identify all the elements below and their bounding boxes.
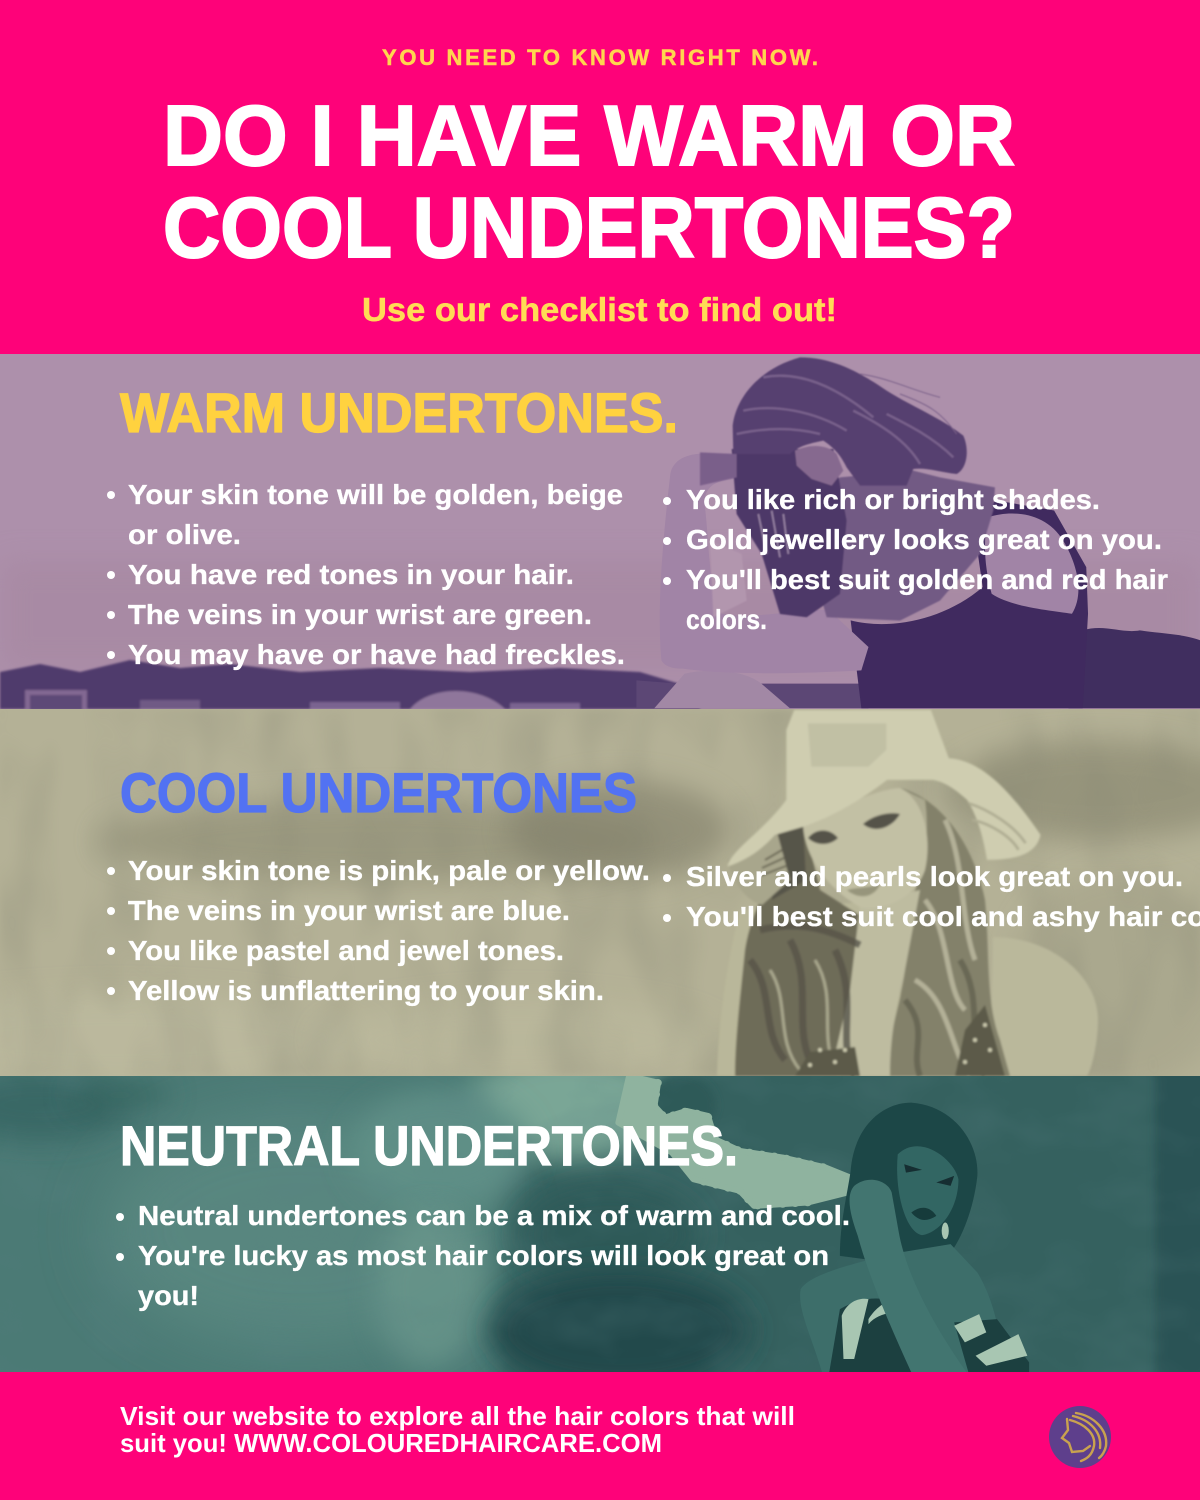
checklist: warm, left column: You may have or have had freckles.	[128, 639, 625, 670]
panel: warm undertones	[0, 354, 1200, 710]
checklist: neutral: You're lucky as most hair colors will look great on	[138, 1240, 829, 1271]
checklist: neutral: you!	[138, 1280, 199, 1311]
photo: woman by the water, purple duotone	[0, 354, 1200, 710]
heading: warm undertones: WARM UNDERTONES.	[120, 381, 678, 444]
checklist: cool, right column: Silver and pearls look great on you.	[686, 861, 1183, 892]
checklist: cool, left column: The veins in your wrist are blue.	[128, 895, 570, 926]
footer call to action: suit you! WWW.COLOUREDHAIRCARE.COM	[120, 1428, 662, 1458]
heading: neutral undertones: NEUTRAL UNDERTONES.	[120, 1114, 738, 1177]
footer panel	[0, 1372, 1200, 1500]
checklist: cool, left column: Your skin tone is pink, pale or yellow.	[128, 855, 650, 886]
eyebrow text: YOU NEED TO KNOW RIGHT NOW.	[382, 45, 818, 70]
subtitle: Use our checklist to find out!	[362, 291, 837, 328]
checklist: warm, left column: You have red tones in your hair.	[128, 559, 574, 590]
checklist: cool, right column	[663, 861, 1200, 932]
checklist: warm, left column: or olive.	[128, 519, 241, 550]
photo: woman in sun hat, olive duotone	[0, 709, 1200, 1090]
checklist: warm, right column	[663, 484, 1168, 635]
title: DO I HAVE WARM OR	[163, 89, 1015, 184]
panel: neutral undertones	[0, 1076, 1200, 1372]
footer call to action: Visit our website to explore all the hair colors that will	[120, 1401, 795, 1431]
title: COOL UNDERTONES?	[163, 181, 1015, 276]
icon: hair care logo	[1049, 1406, 1111, 1468]
title	[163, 89, 1015, 276]
checklist: warm, right column: Gold jewellery looks great on you.	[686, 524, 1162, 555]
checklist: cool, left column: Yellow is unflattering to your skin.	[128, 975, 604, 1006]
footer call to action	[120, 1401, 795, 1458]
checklist: cool, left column: You like pastel and jewel tones.	[128, 935, 564, 966]
checklist: cool, left column	[107, 855, 650, 1006]
checklist: warm, right column: You like rich or bright shades.	[686, 484, 1100, 515]
checklist: warm, left column: The veins in your wrist are green.	[128, 599, 592, 630]
panel: cool undertones	[0, 709, 1200, 1090]
photo: woman with smoke, teal duotone	[0, 1076, 1200, 1372]
header panel	[0, 0, 1200, 354]
heading: cool undertones: COOL UNDERTONES	[120, 761, 637, 824]
checklist: warm, left column: Your skin tone will be golden, beige	[128, 479, 623, 510]
checklist: neutral	[116, 1200, 850, 1311]
checklist: warm, right column: You'll best suit golden and red hair	[686, 564, 1168, 595]
checklist: warm, right column: colors.	[686, 604, 767, 635]
checklist: warm, left column	[107, 479, 625, 670]
checklist: neutral: Neutral undertones can be a mix of warm and cool.	[138, 1200, 850, 1231]
